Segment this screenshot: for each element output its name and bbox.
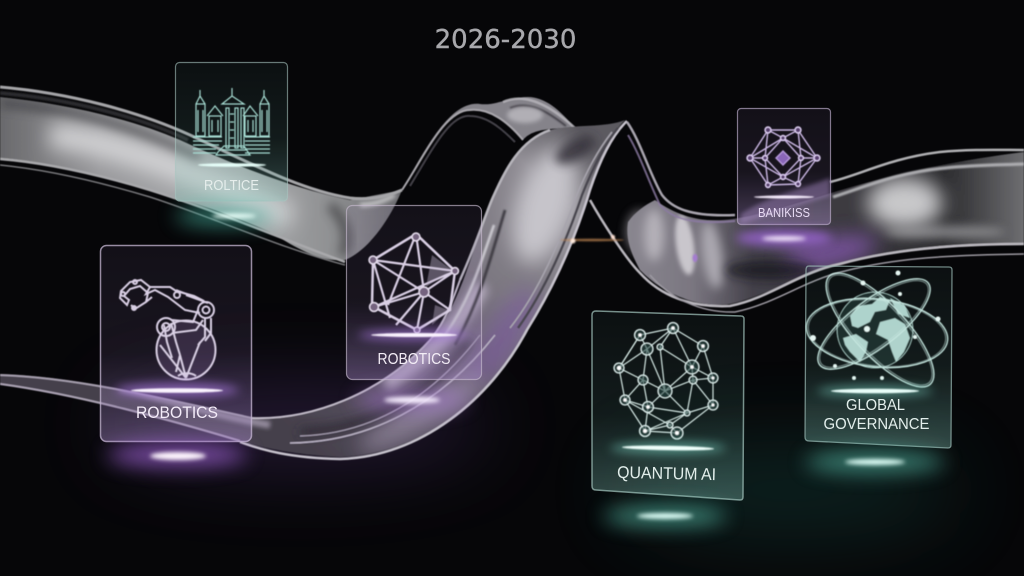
floor glow bbox=[175, 207, 275, 225]
label bbox=[824, 397, 930, 433]
ribbon: right band bbox=[590, 122, 1024, 312]
label: ROLTICE bbox=[204, 177, 259, 194]
icon: globe with orbits bbox=[803, 258, 951, 402]
card: Roltice bbox=[175, 62, 288, 225]
floor glow bbox=[736, 229, 832, 247]
label: BANIKISS bbox=[758, 206, 810, 220]
card glass panel bbox=[592, 311, 744, 500]
glow bar bbox=[754, 196, 814, 198]
card glass panel bbox=[100, 246, 252, 442]
globe continents bbox=[843, 297, 910, 362]
floor glow bbox=[805, 451, 945, 473]
label: ROBOTICS bbox=[136, 403, 218, 422]
teal ambient glow bbox=[620, 440, 960, 540]
icon: robot arm bbox=[120, 280, 216, 380]
glow bar bbox=[115, 383, 239, 397]
streak across card bbox=[741, 178, 830, 224]
lens flare: dark wedge sparkles bbox=[560, 235, 624, 244]
glass ribbon bbox=[0, 87, 1024, 462]
title: 2026-2030 bbox=[435, 25, 576, 55]
icon: hexagon network bbox=[747, 127, 820, 188]
card: Quantum AI bbox=[592, 311, 744, 526]
floor glow bbox=[603, 506, 727, 526]
label: ROBOTICS bbox=[378, 351, 450, 368]
icon: polyhedron network bbox=[369, 233, 458, 333]
glow bar bbox=[198, 163, 266, 167]
icon: quantum network bbox=[614, 322, 718, 439]
purple ambient glow bbox=[110, 385, 490, 465]
glow bar bbox=[817, 385, 933, 397]
card: Robotics network bbox=[346, 206, 482, 410]
glow bar bbox=[610, 442, 726, 454]
floor glow bbox=[107, 443, 247, 467]
card: Global Governance bbox=[803, 258, 952, 473]
ribbon: main rising band bbox=[0, 120, 627, 462]
glow bar bbox=[358, 329, 470, 341]
card glass panel bbox=[346, 206, 482, 380]
card glass panel bbox=[176, 62, 288, 201]
card: Robotics arm bbox=[100, 246, 252, 467]
card: Banikiss bbox=[736, 108, 832, 247]
card glass panel bbox=[738, 108, 830, 224]
label: GLOBAL bbox=[846, 397, 905, 414]
icon: palace building bbox=[193, 88, 270, 155]
ribbon: back loop strand bbox=[402, 97, 575, 190]
card glass panel bbox=[805, 266, 952, 448]
ribbon: upper left band bbox=[0, 87, 402, 265]
label: GOVERNANCE bbox=[824, 416, 930, 433]
floor glow bbox=[356, 390, 468, 410]
label: QUANTUM AI bbox=[617, 463, 716, 484]
